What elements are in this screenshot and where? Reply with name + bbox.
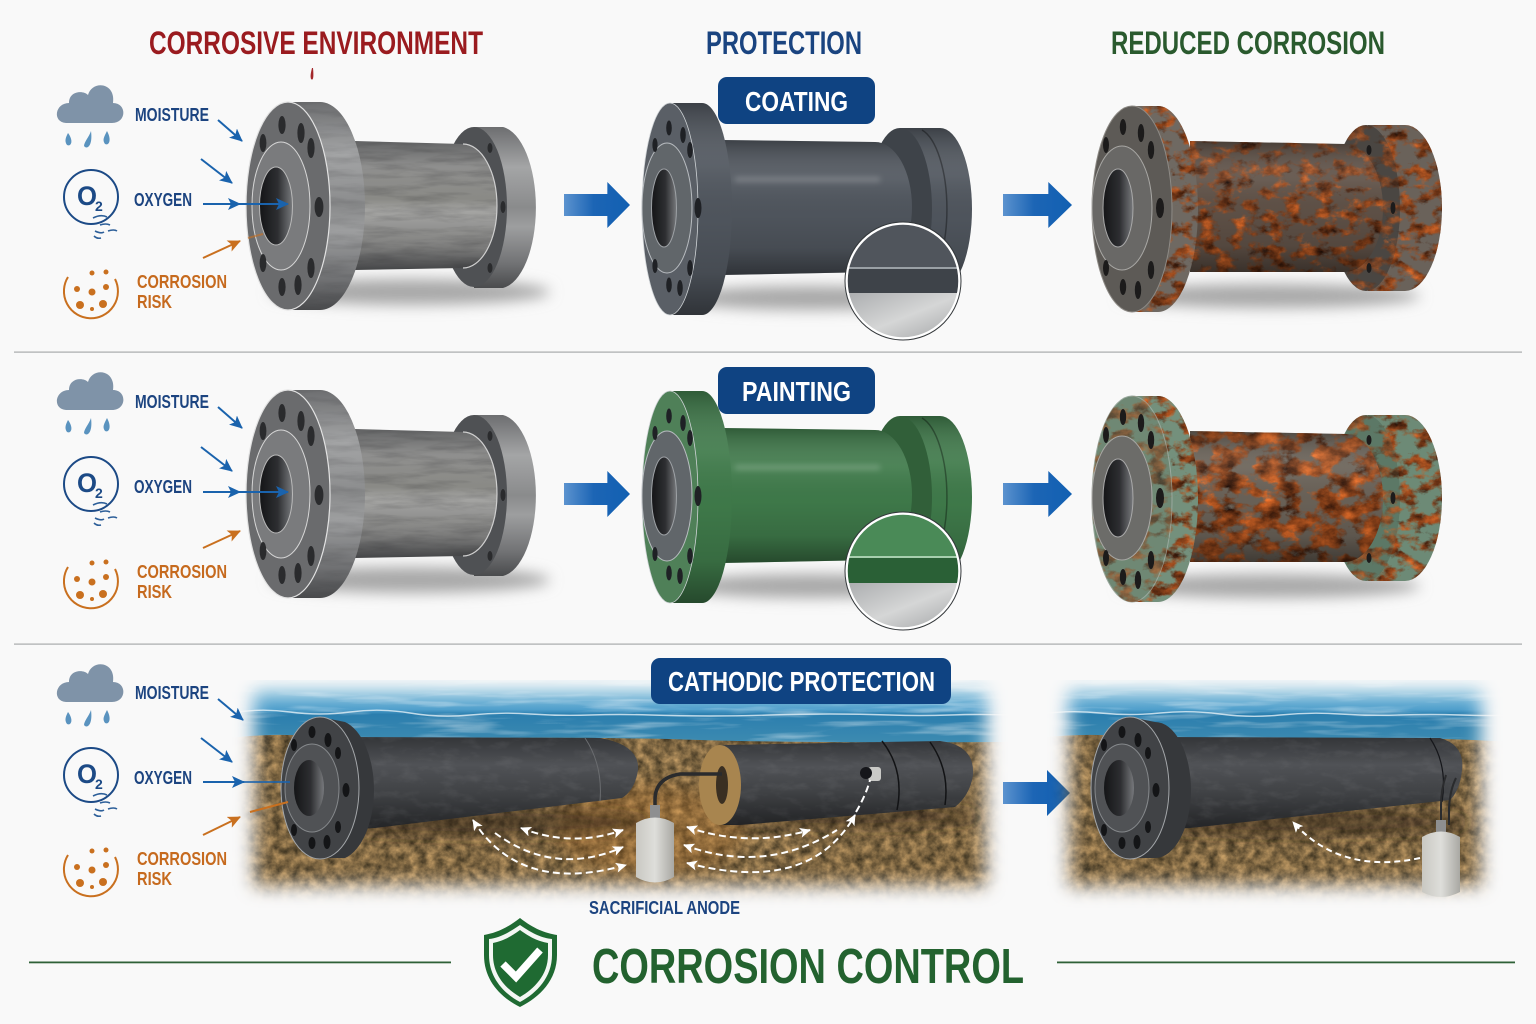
- scene: water and soil left: [230, 680, 1010, 910]
- title: protection: PROTECTION: [706, 25, 862, 61]
- magnifier: coating layers: [840, 220, 965, 343]
- pipe: bare steel row 1: [246, 102, 550, 310]
- label: moisture: MOISTURE: [135, 391, 209, 412]
- label: corrosion risk: RISK: [137, 581, 173, 602]
- label: moisture: MOISTURE: [135, 682, 209, 703]
- panel: row 1 environment factors: [57, 85, 227, 318]
- icon: oxygen: O: [77, 468, 97, 498]
- pipe: bare steel row 2: [246, 390, 550, 598]
- magnifier: paint layers: [840, 510, 965, 633]
- pipe: painted green: [642, 391, 972, 603]
- arrow: to protection row 1: [564, 182, 630, 228]
- label: oxygen: OXYGEN: [134, 767, 192, 788]
- panel: cathodic protection scene: [230, 658, 1010, 918]
- title: reduced corrosion: REDUCED CORROSION: [1111, 25, 1385, 61]
- icon: oxygen: 2: [95, 198, 103, 214]
- arrows: environment attacks row 3: [201, 699, 290, 835]
- arrows: environment attacks row 2: [201, 407, 288, 548]
- icon: oxygen: 2: [95, 485, 103, 501]
- label: corrosion risk: RISK: [137, 868, 173, 889]
- arrow: to result row 2: [1003, 471, 1072, 517]
- icon: moisture cloud: [57, 372, 123, 434]
- scene: long pipe left: [281, 717, 638, 859]
- label: corrosion risk: RISK: [137, 291, 173, 312]
- label: corrosion risk: CORROSION: [137, 561, 227, 582]
- pipe: coated grey: [642, 103, 972, 315]
- panel: protected pipeline result: [1054, 680, 1496, 902]
- icon: corrosion risk: [64, 560, 118, 608]
- label: moisture: MOISTURE: [135, 104, 209, 125]
- icon: oxygen: O: [77, 759, 97, 789]
- scene: long pipe result: [1091, 717, 1462, 859]
- badge: coating: [718, 77, 875, 124]
- icon: moisture cloud: [57, 85, 123, 147]
- scene: water and soil right: [1054, 680, 1496, 902]
- label: oxygen: OXYGEN: [134, 476, 192, 497]
- title: corrosive environment: CORROSIVE ENVIRONMENT: [149, 25, 483, 61]
- icon: moisture cloud: [57, 664, 123, 726]
- title: corrosion control: CORROSION CONTROL: [592, 940, 1024, 994]
- icon: oxygen: [64, 457, 118, 525]
- panel: row 3 environment factors: [57, 664, 227, 896]
- arrows: protective current: [473, 780, 870, 874]
- icon: corrosion risk: [64, 848, 118, 896]
- label: sacrificial anode: SACRIFICIAL ANODE: [589, 898, 740, 918]
- icon: oxygen: [64, 748, 118, 816]
- scene: anode result: [1422, 775, 1460, 897]
- icon: oxygen: [64, 170, 118, 238]
- arrow: to protection row 2: [564, 471, 630, 517]
- badge: painting: [718, 367, 875, 414]
- scene: anode with cable: [636, 774, 722, 882]
- arrow: to result row 1: [1003, 182, 1072, 228]
- icon: oxygen: 2: [95, 776, 103, 792]
- badge: cathodic protection: CATHODIC PROTECTION: [668, 666, 935, 697]
- arrow: to result row 3: [1003, 770, 1070, 816]
- icon: red drip: [311, 68, 313, 80]
- arrows: environment attacks row 1: [201, 120, 288, 258]
- icon: shield with check: [484, 918, 557, 1007]
- badge: coating: COATING: [745, 86, 848, 117]
- scene: cut pipe right: [699, 741, 973, 825]
- pipe: rusted green paint: [1092, 396, 1442, 602]
- badge: painting: PAINTING: [742, 376, 851, 407]
- label: oxygen: OXYGEN: [134, 189, 192, 210]
- label: corrosion risk: CORROSION: [137, 848, 227, 869]
- badge: cathodic protection: [651, 658, 951, 704]
- icon: oxygen: O: [77, 181, 97, 211]
- pipe: rusted grey: [1092, 106, 1442, 312]
- panel: row 2 environment factors: [57, 372, 227, 608]
- icon: corrosion risk: [64, 270, 118, 318]
- arrow: protective current result: [1293, 822, 1420, 862]
- label: corrosion risk: CORROSION: [137, 271, 227, 292]
